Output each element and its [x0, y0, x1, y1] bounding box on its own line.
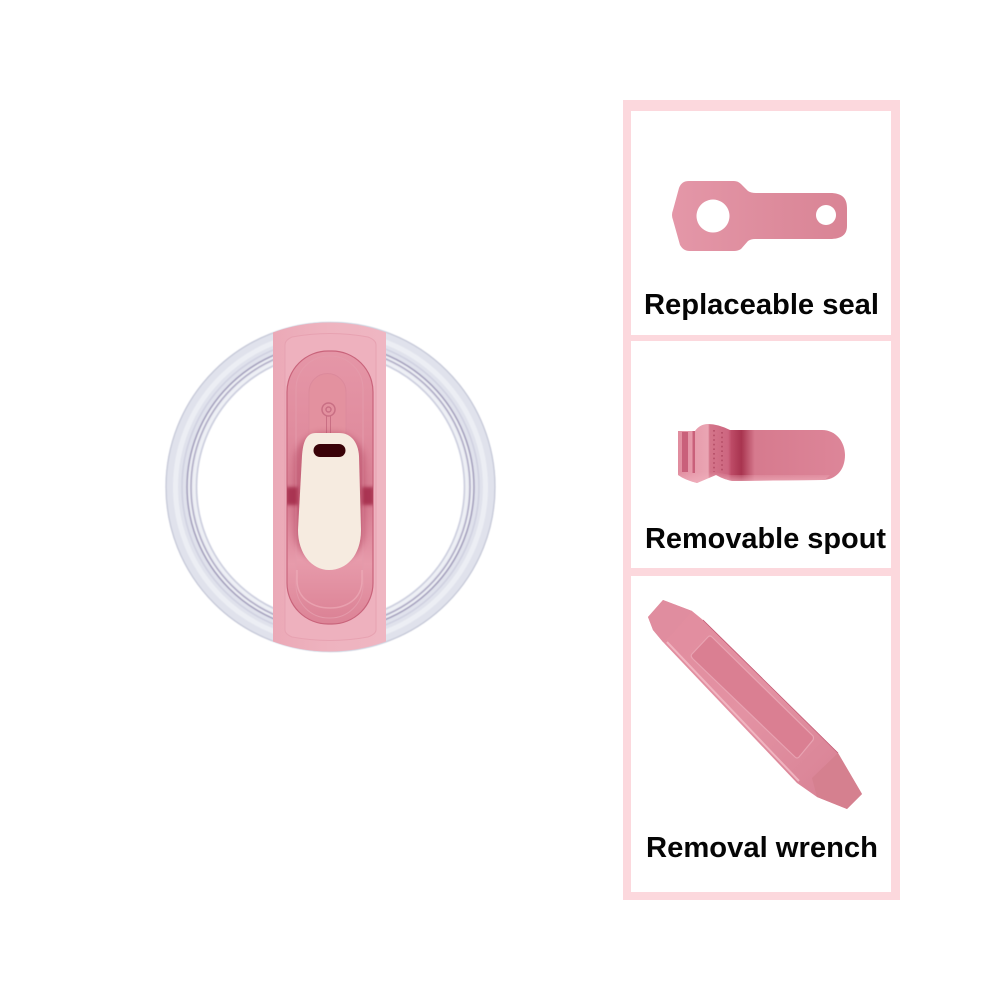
label: removal wrench: Removal wrench: [646, 832, 878, 864]
basin lower curve: [297, 570, 362, 608]
pink slider band: [273, 323, 386, 651]
icon: removal wrench: [648, 600, 862, 809]
left hinge: [286, 487, 298, 505]
label: removable spout: Removable spout: [645, 523, 887, 555]
hinge shadows: [286, 432, 374, 608]
icon: removable spout: [678, 424, 845, 483]
frame: [623, 100, 900, 900]
wrench recess: [691, 636, 814, 758]
label: replaceable seal: Replaceable seal: [644, 289, 879, 321]
wrench bottom end facet: [812, 753, 862, 809]
well inner channel: [309, 374, 346, 440]
right hinge: [362, 487, 374, 505]
wrench light edge: [667, 642, 799, 781]
recessed well: [287, 351, 373, 624]
spout lower highlight: [678, 472, 830, 483]
spout opening: [314, 444, 346, 457]
wrench dark edge: [703, 620, 838, 753]
vent circle: [322, 403, 335, 436]
panel: removable spout: [631, 341, 891, 568]
clear lid ring: [166, 322, 495, 652]
panel: removal wrench: [631, 576, 891, 892]
spout shadow: [294, 432, 365, 562]
wrench top end facet: [648, 600, 692, 642]
band inner bevel: [285, 334, 376, 640]
well inner basin: [296, 356, 363, 618]
cream spout: [298, 433, 361, 570]
icon: replaceable seal: [672, 181, 847, 251]
lower hinge marks: [287, 518, 373, 522]
lid illustration: [166, 322, 495, 652]
spout grip dots: [714, 430, 722, 473]
panel: replaceable seal: [631, 111, 891, 335]
spout grooves: [682, 431, 695, 473]
